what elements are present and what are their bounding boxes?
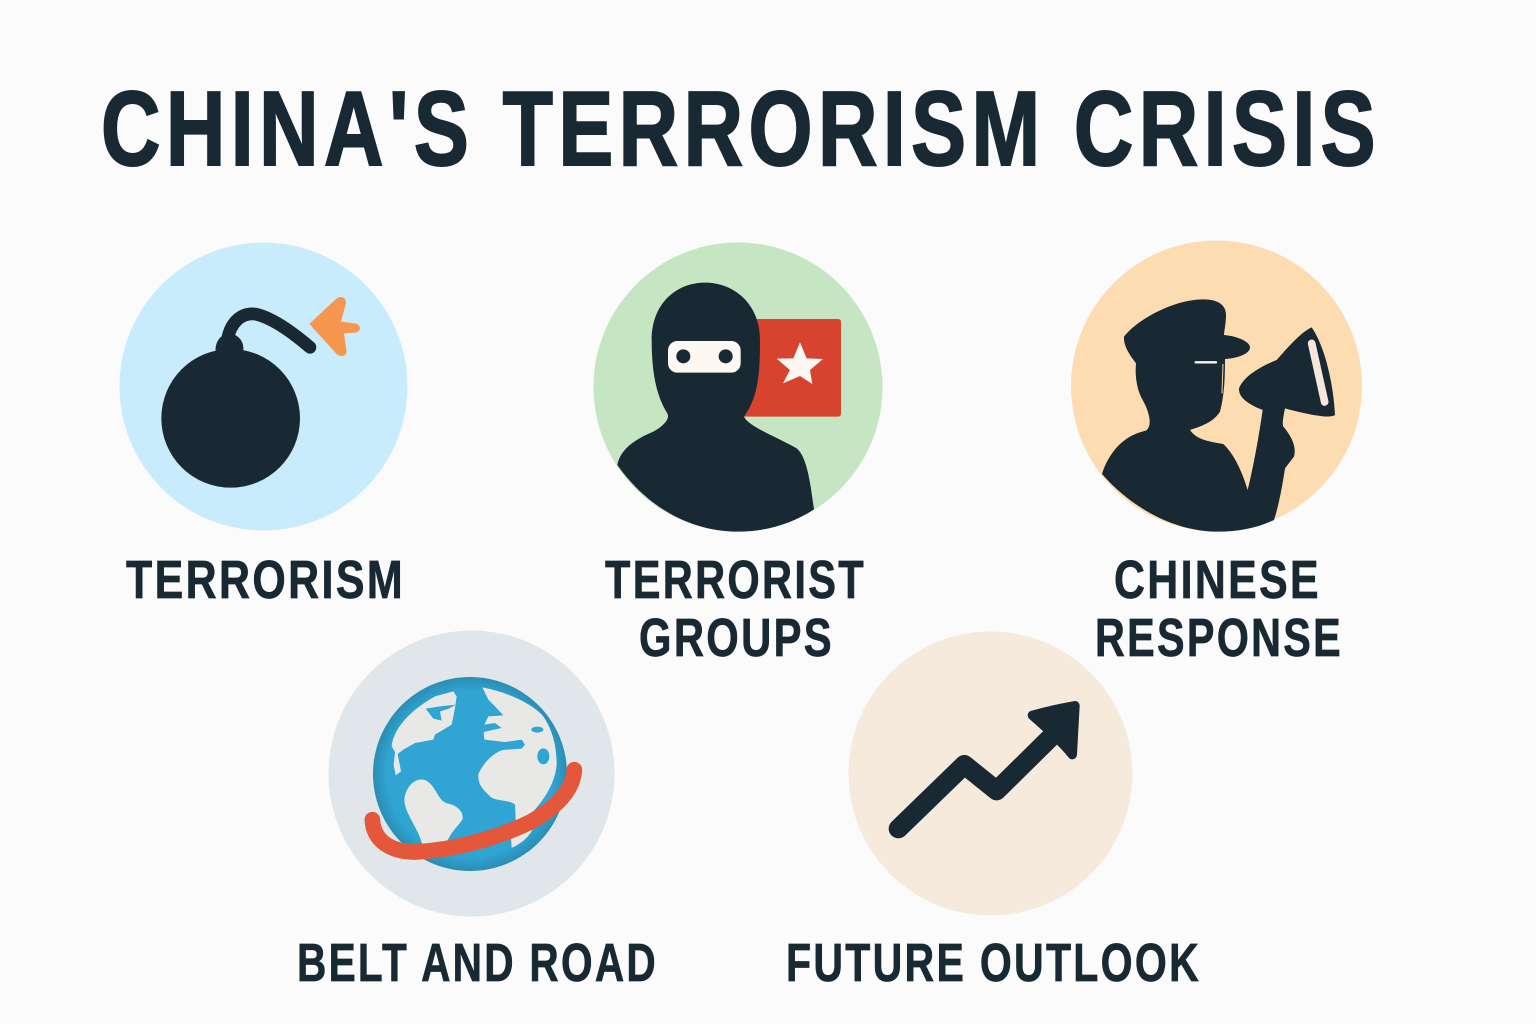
panel: chinese response [1071,240,1362,668]
icon background: light blue circle [120,242,408,530]
panel: terrorism [120,242,408,610]
icon: bomb [161,297,360,488]
icon: rising arrow [898,706,1075,829]
icon background: beige circle [848,632,1132,916]
label: terrorism: TERRORISM [126,550,405,610]
label: terrorist groups: TERRORIST [605,550,866,610]
label: terrorist groups: GROUPS [639,608,834,668]
panel: terrorist groups [594,242,882,668]
label: future outlook: FUTURE OUTLOOK [786,933,1201,993]
icon: flag with star [737,319,841,417]
icon background: green circle [594,242,882,532]
icon: globe with belt [372,677,574,871]
label: belt and road: BELT AND ROAD [297,933,658,993]
label: chinese response [1095,550,1343,668]
label: terrorist groups [605,550,866,668]
label: chinese response: RESPONSE [1095,608,1343,668]
icon background: grey circle [328,630,614,916]
panel: future outlook [786,632,1201,993]
icon: officer with megaphone [1102,299,1335,532]
icon: spark [309,297,360,356]
panel: belt and road [297,630,658,993]
icon background: orange circle [1071,240,1362,532]
label: chinese response: CHINESE [1114,550,1321,610]
icon: masked figure [617,283,814,532]
